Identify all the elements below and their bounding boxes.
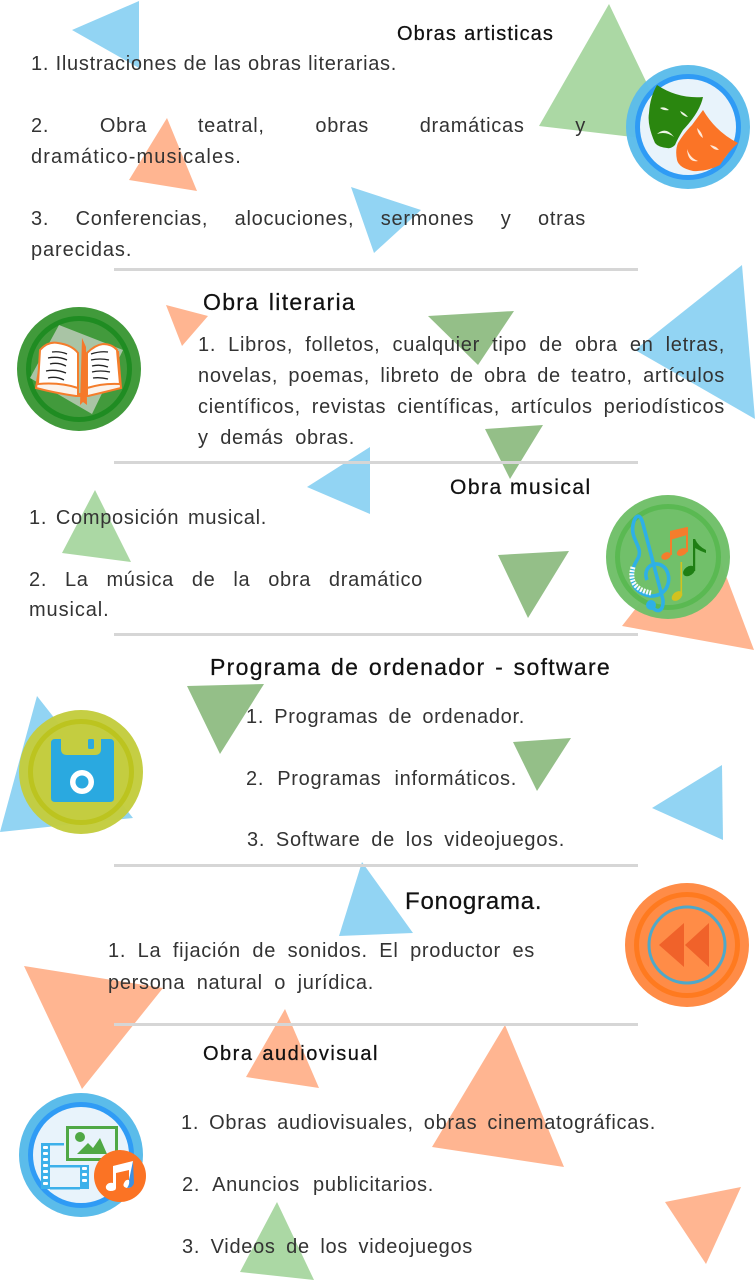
text block: programa de ordenador list: 3. Software de los videojuegos. xyxy=(247,829,565,851)
text block: obras artisticas list: 1. Ilustraciones de las obras literarias. xyxy=(31,53,397,75)
heading: obras artisticas: Obras artisticas xyxy=(397,23,554,45)
icon: theatre masks xyxy=(626,65,750,189)
heading: fonograma: Fonograma. xyxy=(405,888,542,915)
panel: fonograma xyxy=(108,888,542,994)
text block: obra audiovisual list xyxy=(181,1112,656,1258)
icon: audiovisual media xyxy=(19,1093,146,1217)
heading: obra literaria: Obra literaria xyxy=(203,289,356,315)
text block: obra musical list: musical. xyxy=(29,599,110,621)
text block: obras artisticas list xyxy=(31,53,586,261)
text block: obras artisticas list: parecidas. xyxy=(31,239,132,261)
text block: obra literaria list: científicos, revistas científicas, artículos periodísticos xyxy=(198,396,725,418)
text block: programa de ordenador list: 2. Programas informáticos. xyxy=(246,768,517,790)
icon: floppy disk xyxy=(19,710,143,834)
text block: obra audiovisual list: 2. Anuncios publicitarios. xyxy=(182,1174,434,1196)
text block: programa de ordenador list: 1. Programas de ordenador. xyxy=(246,706,525,728)
text block: obra musical list: 2. La música de la obra dramático xyxy=(29,569,423,591)
text block: obra literaria list: novelas, poemas, libreto de obra de teatro, artículos xyxy=(198,365,725,387)
panel: obra literaria xyxy=(198,289,725,449)
heading: obra audiovisual: Obra audiovisual xyxy=(203,1043,379,1065)
text block: obra literaria list xyxy=(198,334,725,449)
text block: programa de ordenador list xyxy=(246,706,565,851)
icon: rewind xyxy=(625,883,749,1007)
text block: obras artisticas list: dramático-musicales. xyxy=(31,146,242,168)
text block: obras artisticas list: 3. Conferencias, alocuciones, sermones y otras xyxy=(31,208,586,230)
text block: fonograma list xyxy=(108,940,535,994)
panel: obra audiovisual xyxy=(181,1043,656,1258)
text block: obra audiovisual list: 1. Obras audiovisuales, obras cinematográficas. xyxy=(181,1112,656,1134)
text block: obra audiovisual list: 3. Videos de los videojuegos xyxy=(182,1236,473,1258)
heading: programa de ordenador: Programa de ordenador - software xyxy=(210,654,611,680)
text block: fonograma list: 1. La fijación de sonidos. El productor es xyxy=(108,940,535,962)
panel: obras artisticas xyxy=(31,23,586,261)
panel: programa de ordenador xyxy=(210,654,611,851)
text block: obra musical list: 1. Composición musical. xyxy=(29,507,267,529)
text block: obra literaria list: y demás obras. xyxy=(198,427,355,449)
text block: obra musical list xyxy=(29,507,423,621)
text block: obra literaria list: 1. Libros, folletos, cualquier tipo de obra en letras, xyxy=(198,334,725,356)
icon: open book xyxy=(17,307,141,431)
text block: obras artisticas list: 2. Obra teatral, obras dramáticas y xyxy=(31,115,586,137)
heading: obra musical: Obra musical xyxy=(450,476,592,499)
panel: obra musical xyxy=(29,476,592,621)
icon: music notes xyxy=(606,495,730,619)
text block: fonograma list: persona natural o jurídica. xyxy=(108,972,374,994)
